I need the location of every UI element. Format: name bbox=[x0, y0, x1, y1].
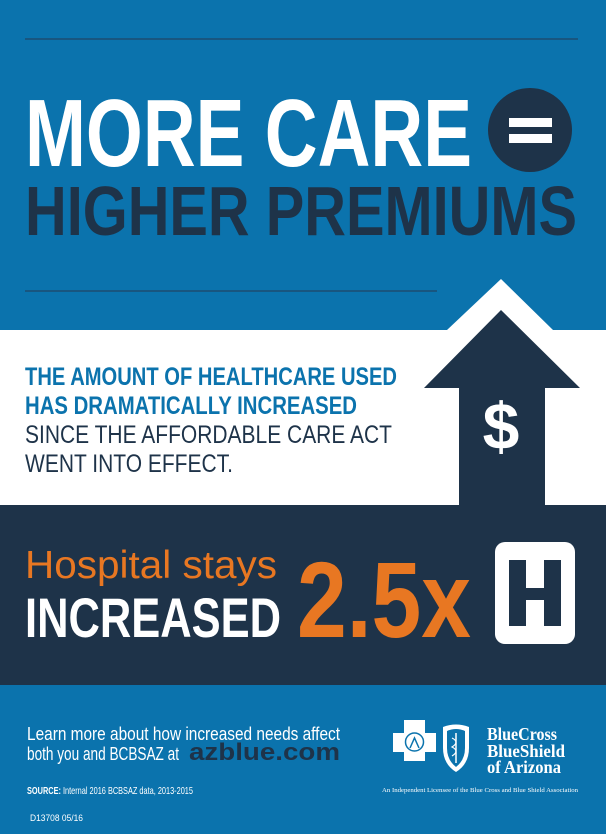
logo: BCBS of Arizona: BlueShield bbox=[487, 741, 565, 761]
panel: hospital stays: Hospital stays bbox=[25, 544, 277, 587]
text block: learn more: Learn more about how increased needs affect bbox=[27, 724, 340, 744]
text block: healthcare used: WENT INTO EFFECT. bbox=[25, 450, 233, 478]
text block: healthcare used bbox=[25, 363, 397, 478]
icon: up arrow with dollar bbox=[424, 279, 580, 505]
icon: shield bbox=[443, 724, 469, 772]
white band bbox=[0, 330, 606, 505]
icon: cross bbox=[393, 720, 436, 761]
logo: BCBS of Arizona: of Arizona bbox=[487, 757, 561, 777]
source: SOURCE: Internal 2016 BCBSAZ data, 2013-2015 bbox=[27, 785, 193, 797]
title: MORE CARE bbox=[25, 80, 472, 187]
text block: healthcare used: THE AMOUNT OF HEALTHCARE USED bbox=[25, 363, 397, 391]
icon: hospital H bbox=[495, 542, 575, 644]
icon: equals circle bbox=[488, 88, 572, 172]
text block: healthcare used: SINCE THE AFFORDABLE CARE ACT bbox=[25, 421, 392, 449]
code: D13708 05/16 bbox=[30, 813, 83, 823]
panel: hospital stays bbox=[0, 505, 606, 685]
text block: healthcare used: HAS DRAMATICALLY INCREASED bbox=[25, 392, 357, 420]
logo: BCBS of Arizona: An Independent Licensee of the Blue Cross and Blue Shield Association bbox=[382, 787, 578, 794]
panel: hospital stays: INCREASED bbox=[25, 586, 281, 649]
text block: learn more: azblue.com bbox=[189, 739, 340, 766]
text block: learn more: both you and BCBSAZ at bbox=[27, 744, 179, 764]
logo: BCBS of Arizona: BlueCross bbox=[487, 724, 557, 744]
panel: hospital stays: 2.5x bbox=[297, 539, 471, 660]
text block: learn more bbox=[27, 724, 340, 766]
footer bbox=[0, 685, 606, 834]
logo: BCBS of Arizona bbox=[382, 720, 578, 794]
icon: up arrow with dollar: $ bbox=[483, 389, 519, 463]
title bbox=[25, 80, 577, 250]
background: top blue bbox=[0, 0, 606, 330]
